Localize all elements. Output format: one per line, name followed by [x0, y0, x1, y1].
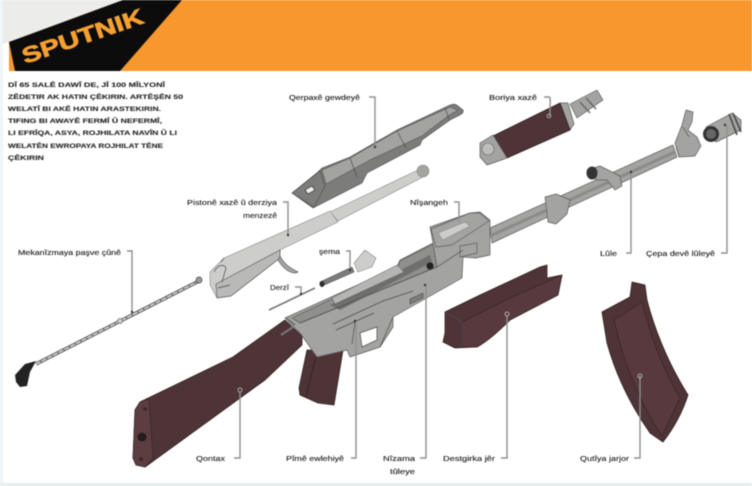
part: stock [133, 320, 302, 467]
front sight [675, 110, 701, 157]
intro text block: ZÊDETIR AK HATIN ÇÊKIRIN. ARTÊŞÊN 50 [8, 92, 184, 101]
part: gas tube with upper handguard [480, 90, 603, 165]
part: muzzle device [703, 113, 741, 142]
label: Sema: şema [319, 249, 340, 256]
handguard retainer [545, 194, 570, 224]
label: Destgirka jer: Destgirka jêr [443, 456, 496, 463]
part: magazine [602, 282, 688, 442]
label: Destgirka jer [443, 312, 509, 463]
label: Sema [319, 249, 351, 271]
label: Qontax [196, 388, 242, 463]
label: Lule [600, 170, 632, 258]
receiver rear sight [431, 213, 489, 247]
part: receiver [281, 212, 490, 357]
label: Mekanizmaya pasve cune: Mekanîzmaya paşve çûnê [18, 250, 121, 257]
part: pistol grip [299, 350, 343, 405]
label: Cepa deve luleye: Çepa devê lûleyê [646, 251, 715, 258]
part: piston and bolt carrier [210, 165, 429, 298]
label: Nisangeh [410, 200, 459, 222]
label: Boriya xaze [489, 95, 551, 118]
part: recoil spring [15, 277, 202, 387]
label: Lule: Lûle [600, 251, 617, 258]
part: firing pin [320, 250, 376, 287]
label: Pime ewlehiye [286, 320, 356, 463]
label: Derzi: Derzî [270, 285, 290, 292]
label: Cepa deve luleye [646, 124, 727, 258]
intro text block: LI EFRÎQA, ASYA, ROJHILATA NAVÎN Û LI [8, 128, 177, 137]
label: Nizama tuleye: Nîzama [383, 456, 415, 463]
part: top receiver cover [292, 104, 463, 208]
label: Nisangeh: Nîşangeh [410, 200, 448, 207]
intro text block: ÇÊKIRIN [8, 153, 45, 162]
label: Qutiya jarjor: Qutîya jarjor [580, 456, 630, 463]
logo: Sputnik: SPUTNIK [18, 4, 147, 69]
part: lower handguard [443, 265, 562, 348]
label: Qerpaxe gewdeye: Qerpaxê gewdeyê [289, 95, 360, 102]
label: Pistone xaze u derziya menzeze: menzezê [243, 213, 277, 220]
label: Pistone xaze u derziya menzeze: Pistonê xazê û derziya [187, 200, 277, 207]
label: Pistone xaze u derziya menzeze [187, 200, 289, 236]
label: Qerpaxe gewdeye [289, 95, 376, 148]
intro text block: TIFING BI AWAYÊ FERMÎ Û NEFERMÎ, [8, 116, 162, 125]
intro text block [8, 80, 184, 162]
label: Pime ewlehiye: Pîmê ewlehiyê [286, 456, 344, 463]
logo: Sputnik [9, 0, 182, 71]
gas block [587, 166, 622, 190]
intro text block: WELATÎ BI AKÊ HATIN ARASTEKIRIN. [8, 104, 161, 113]
part: barrel [490, 110, 701, 243]
header banner [3, 0, 752, 71]
intro text block: DÎ 65 SALÊ DAWÎ DE, JÎ 100 MÎLYONÎ [8, 80, 167, 89]
label: Nizama tuleye: tûleye [390, 469, 415, 476]
part: retaining pin [269, 288, 315, 310]
label: Qutiya jarjor [580, 374, 642, 463]
label: Mekanizmaya pasve cune [18, 250, 133, 313]
label: Boriya xaze: Boriya xazê [489, 95, 537, 102]
label: Derzi [270, 285, 302, 295]
intro text block: WELATÊN EWROPAYA ROJHILAT TÊNE [8, 141, 164, 150]
label: Nizama tuleye [383, 284, 426, 476]
label: Qontax: Qontax [196, 456, 226, 463]
